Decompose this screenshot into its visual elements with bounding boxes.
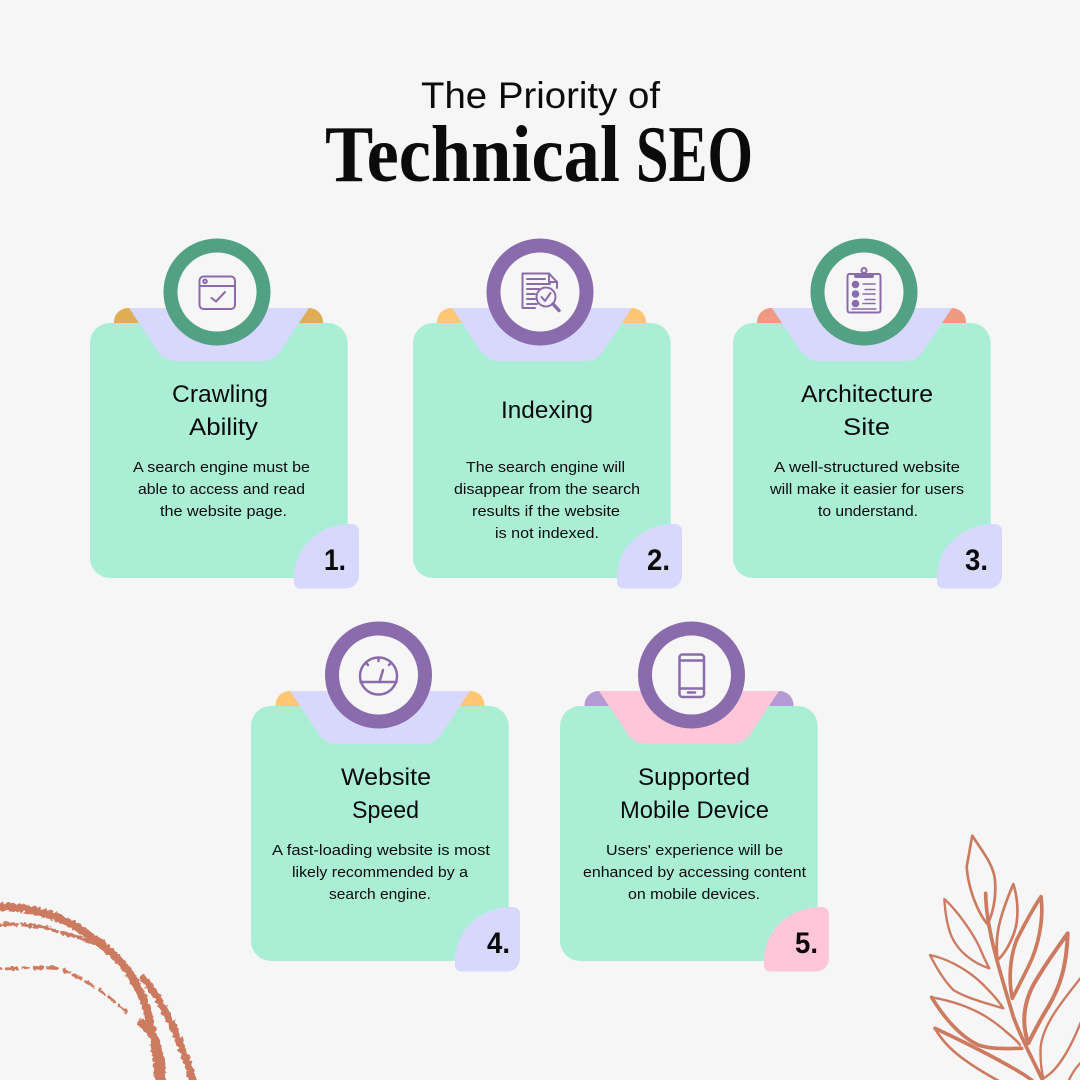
icon: speedometer [360,658,397,694]
icon: clipboard checklist [848,268,880,312]
number badge 4 [455,907,520,972]
text: website speed description: search engine. [329,886,431,903]
heading: crawling ability: Ability [189,414,258,441]
number badge 1 [294,524,359,588]
number badge 5: 5. [795,927,818,960]
text: architecture description: A well-structured website [774,459,960,476]
decoration: leaf branch [930,836,1080,1080]
text: architecture description [769,459,964,520]
heading: crawling ability: Crawling [172,381,268,408]
heading: supported mobile device: Mobile Device [620,797,769,824]
title: SEO [636,109,753,199]
icon: mobile phone [680,654,704,697]
text: indexing description: results if the website [472,503,620,520]
text: mobile description: enhanced by accessing content [583,864,807,881]
text: crawling ability description: the website page. [160,503,287,520]
text: indexing description: disappear from the search [454,481,640,498]
panel: supported mobile device [560,628,829,972]
number badge 2: 2. [647,544,670,577]
text: crawling ability description [133,459,310,520]
heading: crawling ability [172,381,268,441]
title: The Priority of [421,75,661,116]
heading: indexing: Indexing [501,397,593,424]
text: mobile description [583,842,807,903]
text: indexing description: The search engine will [466,459,625,476]
panel: crawling ability [90,246,359,588]
number badge 3: 3. [965,544,988,577]
text: crawling ability description: able to access and read [138,481,305,498]
heading: architecture site [801,381,933,441]
text: architecture description: to understand. [818,503,918,520]
heading: supported mobile device: Supported [638,764,750,791]
number badge 1: 1. [324,544,346,577]
heading: website speed: Website [341,764,431,791]
decoration: hand-drawn arcs [0,907,195,1080]
heading: website speed [341,764,431,824]
heading: website speed: Speed [352,797,419,824]
number badge 4: 4. [487,927,510,960]
text: website speed description: A fast-loading website is most [272,842,491,859]
number badge 5 [764,907,829,972]
text: crawling ability description: A search engine must be [133,459,310,476]
title [325,75,753,199]
text: mobile description: on mobile devices. [628,886,760,903]
heading: architecture site: Architecture [801,381,933,408]
heading: supported mobile device [620,764,769,824]
title: Technical [325,109,620,199]
panel: indexing [413,246,682,588]
number badge 2 [617,524,682,588]
icon: browser window with check [200,276,235,309]
text: mobile description: Users' experience will be [606,842,783,859]
heading: architecture site: Site [843,414,890,441]
panel: website speed [251,628,520,972]
text: website speed description [272,842,491,903]
number badge 3 [937,524,1002,588]
text: website speed description: likely recommended by a [292,864,469,881]
icon: document with magnifier [522,274,559,310]
text: indexing description [454,459,640,542]
text: architecture description: will make it easier for users [769,481,964,498]
text: indexing description: is not indexed. [495,525,599,542]
panel: architecture site [733,246,1002,588]
